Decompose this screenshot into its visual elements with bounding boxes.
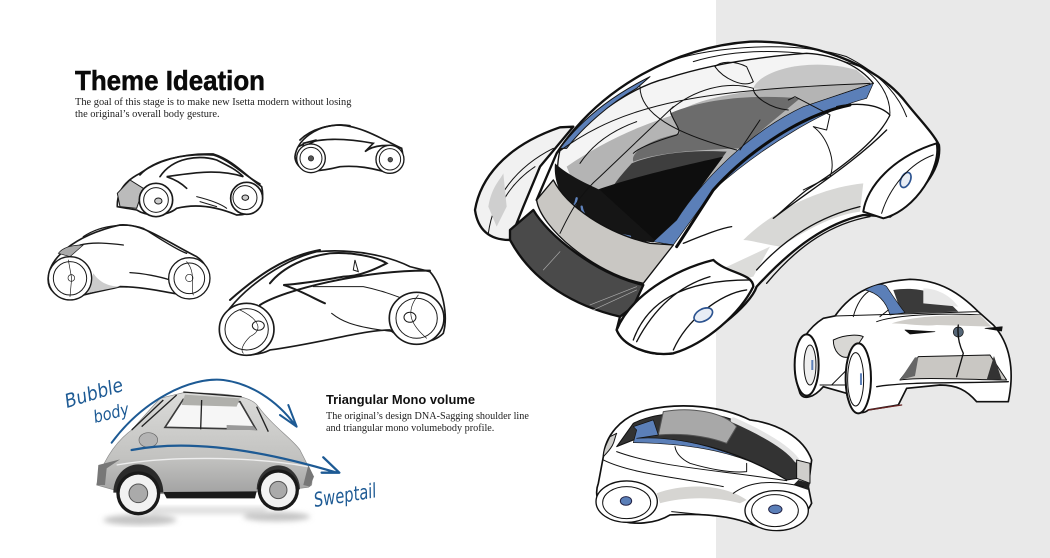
car body	[97, 393, 312, 494]
car reflection	[103, 507, 310, 525]
title: Theme Ideation	[75, 65, 265, 96]
description text: and triangular mono volumebody profile.	[326, 423, 494, 434]
arrow: bubble curve	[112, 380, 297, 443]
wheels	[113, 464, 163, 493]
blue headlights	[552, 188, 630, 237]
glass: light upper band	[753, 65, 872, 90]
background panel: grey right side	[716, 0, 1050, 558]
handwriting: Sweptail: Sweptail	[312, 478, 378, 512]
glass: mid tone	[567, 83, 871, 242]
handwriting: body: body	[91, 400, 132, 428]
sketch: top middle car	[117, 154, 263, 217]
main car: front three-quarter top view	[475, 42, 939, 354]
rear wheel	[863, 143, 937, 218]
side window lines	[835, 290, 980, 322]
arrow: sweptail line	[132, 446, 339, 473]
shoulder shading	[892, 315, 992, 327]
left wheel arch	[475, 127, 573, 240]
sketch: large lower car	[219, 250, 445, 355]
sketch lines	[603, 447, 803, 517]
description text: The original’s design DNA-Sagging shoulder line	[326, 411, 529, 422]
rear three-quarter car	[795, 279, 1011, 413]
blue roof band	[633, 420, 787, 480]
wheels	[795, 334, 819, 396]
right wheel	[745, 491, 808, 531]
top side car	[596, 406, 812, 531]
glass: lower dark strip	[555, 163, 657, 242]
dark bumper	[510, 210, 643, 317]
handwriting: Bubble: Bubble	[62, 374, 126, 413]
subheading: Triangular Mono volume	[326, 392, 475, 407]
blue pillar	[865, 284, 905, 315]
glass: dark seat tone	[633, 97, 800, 162]
lower body shading	[657, 486, 747, 503]
sketch: top right car	[295, 125, 404, 173]
intro text: The goal of this stage is to make new Isetta modern without losing	[75, 97, 351, 108]
body silhouette	[537, 42, 939, 354]
rear diffuser panel	[900, 355, 1007, 380]
glass: black tone	[597, 157, 723, 242]
side sketch strokes	[683, 207, 870, 283]
photo: original Isetta with blue annotations	[97, 380, 339, 525]
window	[165, 399, 256, 429]
rear badge	[953, 327, 963, 337]
front panel	[537, 180, 673, 283]
underside	[163, 491, 257, 498]
body	[597, 406, 812, 528]
body	[795, 279, 1011, 413]
grey body shading	[743, 183, 863, 247]
glass canopy	[557, 53, 873, 242]
side cove	[833, 335, 863, 357]
left wheel	[596, 481, 657, 522]
roof sketch outline	[673, 47, 907, 117]
door and trim lines	[132, 392, 268, 432]
blue roof pillar	[653, 83, 873, 245]
rear glass	[893, 289, 958, 313]
glass canopy	[617, 413, 798, 480]
interior seat and sketch lines	[557, 62, 870, 233]
blue upper side strip	[560, 77, 650, 148]
sketch: middle left car	[48, 225, 210, 300]
intro text: the original’s overall body gesture.	[75, 109, 220, 120]
glass: deep tone	[608, 151, 727, 220]
front wheel	[617, 260, 753, 354]
